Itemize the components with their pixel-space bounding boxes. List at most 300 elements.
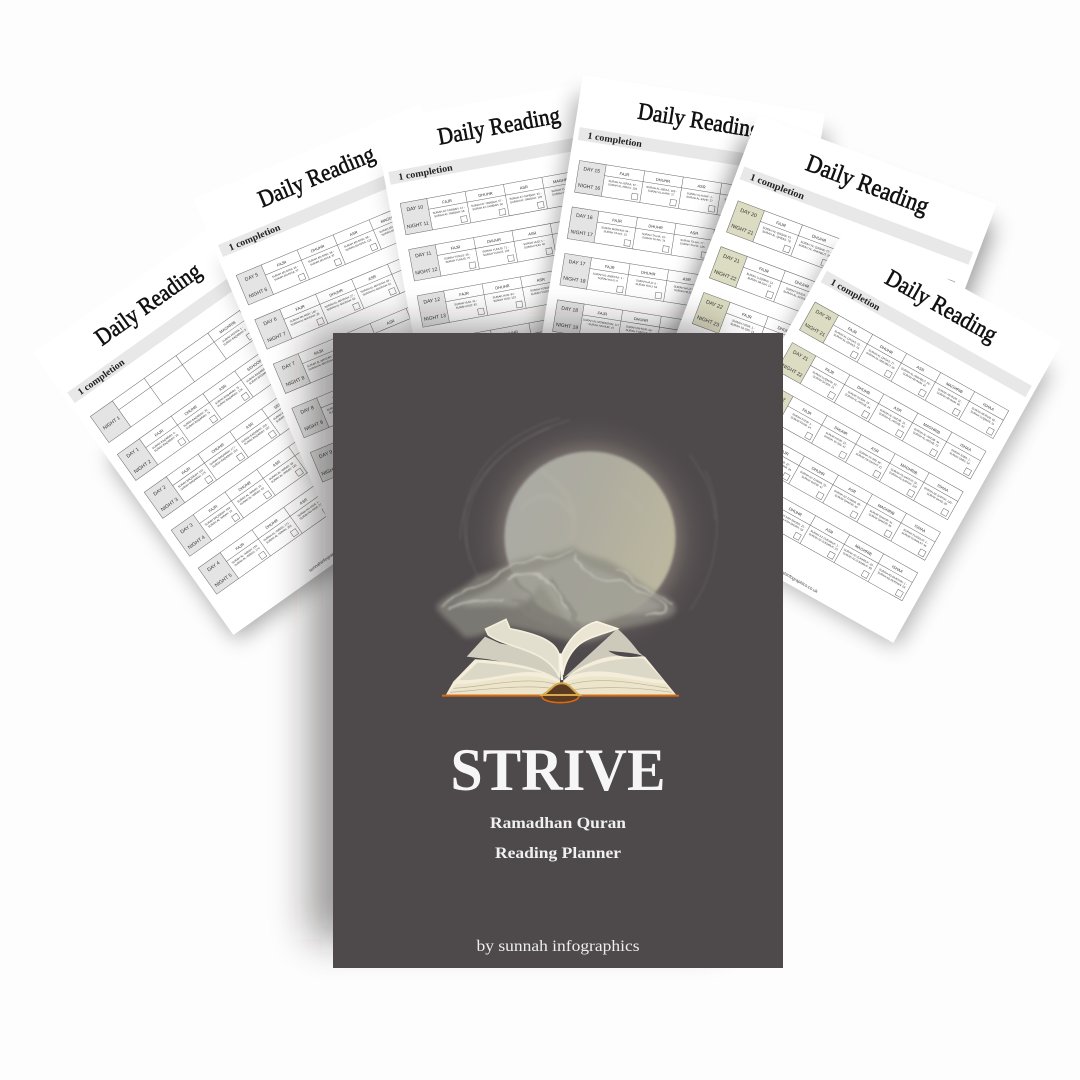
row day 23: SURAH FUSSILAT: 46 <box>901 531 928 548</box>
row day 22: SURAH FATIR: 14 <box>790 415 812 430</box>
row night 1: NIGHT 1 <box>102 415 122 431</box>
row day 11: NIGHT 12 <box>415 267 438 277</box>
row day 5: MAGHRIB <box>380 212 399 224</box>
row day 21: SURAH AL-AHZAB: 14 <box>783 289 812 304</box>
row day 11: FAJR <box>450 244 461 251</box>
row day 23: SURAH GHAFIR: 41 - <box>869 509 895 526</box>
book left pages <box>446 619 560 695</box>
row day 5: FAJR <box>276 259 287 268</box>
row day 5: SURAH AN-NISA: 24 - <box>271 264 299 279</box>
row night 1: SURAH BAQARAH: 5 <box>222 327 247 347</box>
row day 2: SURAH BAQARAH: 233 - <box>272 399 301 421</box>
row day 13: ASR <box>545 323 554 329</box>
row day 21: ISHAA <box>959 442 973 453</box>
row day 12: SURAH YUSUF: 1 - <box>530 284 555 293</box>
row day 5: SURAH AN-NISA: 87 <box>309 253 336 267</box>
row day 16: NIGHT 17 <box>570 229 593 238</box>
row day 23: SURAH SAAD: 27 - <box>768 452 792 468</box>
row day 21: ASR <box>893 405 903 413</box>
row day 3: ASR <box>272 459 281 468</box>
row day 2: SURAH BAQARAH: 202 <box>211 448 239 469</box>
sheet 2 section heading: 1 completion <box>228 223 283 254</box>
row day 10: SURAH AT-TAWBAH: 57 - <box>471 198 504 208</box>
row day 20: SURAH AR-RUM: 60 <box>936 390 961 407</box>
row day 4: SURAH AN-NISA: 1 - <box>297 499 321 518</box>
row day 10: SURAH AT-TAWBAH: 93 - <box>509 191 542 201</box>
sheet 1 footer: sunnahinfographics.co.uk <box>308 539 352 573</box>
row day 2: SURAH BAQARAH: 203 - <box>240 422 269 444</box>
row day 22: SURAH YA-SIN: 48 - <box>858 449 883 466</box>
row day 15: DHUHR <box>655 177 671 184</box>
row day 1: SURAH BAQARAH: 75 - <box>214 384 241 405</box>
row day 24: SURAH ASH-SHURA: 53 <box>775 513 804 532</box>
row day 4: SURAH AL-'IMRAN: 200 <box>265 523 293 545</box>
row day 6: DHUHR <box>328 288 344 298</box>
open book <box>442 619 679 703</box>
sheet 1 section heading: 1 completion <box>76 357 128 398</box>
row day 22 <box>754 383 963 520</box>
row day 18: SURAH FURQAN: 20 <box>625 328 653 336</box>
row day 5: SURAH AN-NISA: 57 <box>273 268 300 282</box>
row day 1: SURAH BAQARAH: 25 <box>153 433 180 453</box>
row day 8: SURAH AL-AN'AM: 74 <box>328 400 356 415</box>
book spine and cover <box>442 653 679 703</box>
row day 23: ISHAA <box>914 523 927 534</box>
row day 23: ASR <box>847 486 857 495</box>
row day 24: SURAH AD-DUKHAN: 59 <box>877 570 907 590</box>
row day 6: SURAH AL-MA'IDAH: 27 - <box>324 293 355 309</box>
row day 23: SURAH GHAFIR: 40 <box>834 493 859 509</box>
row day 17: DHUHR <box>641 270 656 277</box>
row day 21: SURAH SAJDA: 15 <box>747 276 772 289</box>
row day 4 <box>198 440 398 594</box>
row day 1: SURAH BAQARAH: 124 <box>216 387 244 408</box>
row day 2: SURAH BAQARAH: 177 - <box>209 444 237 466</box>
row day 21: SURAH AL-AHZAB: 15 - <box>879 408 908 426</box>
row day 12: NIGHT 13 <box>423 313 447 323</box>
row day 5: SURAH AN-NISA: 125 - <box>379 219 408 234</box>
row day 22: DHUHR <box>777 325 793 335</box>
row day 22: ASR <box>870 446 880 454</box>
row day 10: MAGHRIB <box>553 176 572 184</box>
row day 21: SURAH SAJDA: 15 <box>812 374 836 390</box>
row day 15: SURAH AL-ISRAA: 105 - <box>646 185 677 194</box>
row day 23: FAJR <box>779 448 790 457</box>
row day 22 <box>692 292 920 404</box>
sheet 5 section heading: 1 completion <box>748 172 806 203</box>
row day 7: DHUHR <box>347 332 362 342</box>
row day 1: FAJR <box>154 428 165 438</box>
row day 21: MAGHRIB <box>922 422 941 435</box>
row day 8: FAJR <box>332 392 343 400</box>
moon illustration <box>436 412 717 703</box>
smoke <box>436 547 676 642</box>
row day 17: DAY 17 <box>568 259 586 268</box>
row day 21: SURAH AL-AHZAB: 73 <box>912 430 940 448</box>
row day 1 <box>117 326 317 480</box>
row day 11: SURAH YUNUS: 109 <box>483 248 510 257</box>
row day 20: SURAH AL-QASAS: 77 - <box>868 348 897 367</box>
row day 11: SURAH YUNUS: 36 - <box>444 252 471 261</box>
row day 21: SURAH SAJDA: 16 - <box>785 286 812 300</box>
row day 7: SURAH AL-MA'IDAH: 82 - <box>306 352 338 368</box>
row day 20: SURAH LUQMAN: 11 <box>970 409 996 426</box>
row day 7: DAY 7 <box>281 361 297 372</box>
row day 1: ASR <box>218 383 227 392</box>
row day 18: DHUHR <box>633 316 649 323</box>
row day 3: SURAH AL-'IMRAN: 15 <box>207 508 233 529</box>
row day 16: DHUHR <box>648 223 663 230</box>
row day 4: FAJR <box>234 542 245 551</box>
row day 2: DAY 2 <box>152 484 168 498</box>
row day 12: ASR <box>536 276 545 283</box>
row day 23: SURAH GAFIR: 47 <box>801 475 824 490</box>
row day 20: ISHAA <box>982 402 995 412</box>
row day 3: FAJR <box>207 504 218 513</box>
row day 18: - SURAH AN-NUR: 47 <box>586 322 615 330</box>
row day 17: FAJR <box>605 264 615 270</box>
cover byline: by sunnah infographics <box>476 938 640 955</box>
row day 10 <box>400 163 624 235</box>
row day 12: SURAH HUD: 84 - <box>492 292 516 300</box>
row day 21: SURAH LUQMAN: 12 - <box>746 272 775 286</box>
row day 15: SURAH AL-ISRAA: 67 - <box>608 179 638 187</box>
row day 10: ASR <box>519 184 528 190</box>
book right pages <box>562 622 676 695</box>
row day 21: SURAH AL-AHZAB: 43 <box>878 411 906 429</box>
row day 20: NIGHT 21 <box>730 223 754 237</box>
row day 10: FAJR <box>442 198 452 205</box>
row day 4: SURAH AL-'IMRAN: 171 - <box>263 520 291 542</box>
row day 22: SURAH YA-SIN: 47 <box>823 434 847 449</box>
row day 20: DHUHR <box>811 233 827 243</box>
row day 21: SURAH AL-AHZAB: 44 - <box>913 427 942 445</box>
sheet 3 section heading: 1 completion <box>398 163 454 183</box>
sheet 6: days 20 to 24 <box>679 223 1066 647</box>
row day 22: SURAH AS-SAFFAT: 125 - <box>923 486 954 506</box>
row day 24 <box>732 477 918 601</box>
row day 10: SURAH AT-TAWBAH: 92 <box>472 202 504 211</box>
row day 18: DAY 18 <box>561 306 579 314</box>
row day 2: SURAH BAQARAH: 142 - <box>177 467 205 489</box>
row day 24: SURAH AZ-ZUKHRUF: 1 - <box>810 529 841 549</box>
row day 5: DAY 5 <box>244 272 260 283</box>
row day 17: SURAH HAJJ: 5 <box>597 276 619 283</box>
row day 11: SURAH YUNUS: 70 <box>445 256 471 264</box>
sheet 4 section heading: 1 completion <box>587 132 643 150</box>
row day 2: FAJR <box>180 466 191 476</box>
row day 20: SURAH AR-RUM: 10 <box>902 371 927 388</box>
row day 1: SURAH BAQARAH: 125 - <box>245 361 274 383</box>
row day 10: DHUHR <box>478 190 493 198</box>
row day 16: SURAH TA-HA: 15 - <box>642 232 667 240</box>
row day 12: SURAH YUSUF: 52 <box>531 288 556 296</box>
sheet 3 title: Daily Reading <box>436 103 562 151</box>
row day 20: ASR <box>916 364 925 373</box>
row day 18: FAJR <box>597 310 608 317</box>
row day 11: SURAH HUD: 40 <box>524 242 546 250</box>
row day 23: DHUHR <box>811 465 826 477</box>
row day 21: DAY 21 <box>791 349 809 363</box>
row day 13 <box>426 302 650 373</box>
row night 1 <box>90 288 290 443</box>
row day 8 <box>292 323 509 438</box>
row day 11: SURAH YUNUS: 71 - <box>482 245 509 254</box>
row day 4: ASR <box>299 497 308 506</box>
sheet 5: days 20 to 22 <box>628 114 1002 543</box>
row day 22: SURAH AS-SAFFAT: 22 - <box>890 467 919 486</box>
row day 17: SURAH AL-ANBIYAA: 1 - <box>593 272 624 280</box>
sheet 4: days 15 to 18 <box>525 74 832 456</box>
row day 22: NIGHT 23 <box>696 315 720 329</box>
row day 12: DHUHR <box>495 283 510 290</box>
row day 20: DAY 20 <box>739 208 758 219</box>
row day 22: SURAH FATIR: 15 - <box>825 431 848 446</box>
cover shadow <box>310 327 720 939</box>
row day 3: SURAH AL-'IMRAN: 133 <box>270 463 298 484</box>
sheet 2: days 5 to 9 <box>193 104 553 518</box>
row day 23: SURAH AZ-ZUMAR: 32 - <box>799 470 828 488</box>
row day 5 <box>236 190 453 305</box>
row day 7: ASR <box>386 318 395 326</box>
row day 20: MAGHRIB <box>945 381 964 395</box>
row day 20 <box>799 302 1009 439</box>
row day 23: SURAH AZ-ZUMAR: 44 <box>764 454 792 472</box>
row day 18 <box>553 300 777 366</box>
row day 22: SURAH AS-SAFFAT: 21 <box>855 452 883 470</box>
row day 24: ASR <box>825 527 834 535</box>
row day 1: SURAH BAQARAH: 141 <box>248 364 276 386</box>
row day 22: DHUHR <box>833 425 849 436</box>
row night 1: MAGHRIB <box>218 319 237 335</box>
row day 7 <box>273 278 490 393</box>
row day 21: FAJR <box>758 266 770 274</box>
row day 10: DAY 10 <box>406 204 424 213</box>
row day 16: FAJR <box>612 217 622 224</box>
sheet 6 title: Daily Reading <box>881 265 1001 348</box>
row day 5: SURAH AN-NISA: 124 <box>345 237 372 252</box>
row day 4: NIGHT 5 <box>214 572 234 589</box>
row day 23: SURAH GHAFIR: 85 <box>868 512 893 529</box>
row day 1: SURAH BAQARAH: 26 - <box>182 407 210 428</box>
row day 24: SURAH ASH-SHURA: 13 - <box>776 510 807 529</box>
row day 21: DHUHR <box>856 384 871 396</box>
row day 21: NIGHT 22 <box>781 363 803 379</box>
row day 20: DAY 20 <box>814 309 832 322</box>
row day 20: FAJR <box>847 326 858 335</box>
row day 23: SURAH AZ-ZUMAR: 48 - <box>833 489 862 508</box>
sheet 1: days 1 to 4 <box>33 211 437 640</box>
row day 22: SURAH FATIR: 1 - <box>792 412 814 427</box>
row day 11: SURAH HUD: 1 - <box>523 238 545 246</box>
row day 16: SURAH TA-HA: 13 <box>603 229 627 237</box>
sheet 2 title: Daily Reading <box>254 141 379 213</box>
row day 15: DAY 15 <box>583 166 601 175</box>
row day 8: NIGHT 9 <box>304 419 324 433</box>
row day 20: SURAH AL-QASAS: 51 - <box>834 329 863 348</box>
row day 15: SURAH AL-KAHF: 1 - <box>686 191 714 199</box>
row day 15: FAJR <box>619 171 630 177</box>
row day 22: DAY 22 <box>705 299 723 311</box>
row day 20: SURAH AL-QASAS: 76 <box>833 332 860 350</box>
row day 21: SURAH AL-AHZAB: 14 <box>844 392 872 410</box>
row day 10: SURAH YUNUS: 35 <box>552 188 577 197</box>
row day 11: DAY 11 <box>415 251 432 259</box>
row day 21: SURAH SABA: 54 <box>949 451 971 466</box>
row day 23 <box>755 437 940 560</box>
row day 20: SURAH AL-QASAS: 51 - <box>762 225 793 240</box>
sheet 4 title: Daily Reading <box>636 99 762 144</box>
row day 11: MAGHRIB <box>561 222 581 231</box>
row day 2: ASR <box>245 421 254 430</box>
row day 15: ASR <box>697 183 706 190</box>
row day 6: DAY 6 <box>263 316 278 327</box>
row day 13: DAY 13 <box>432 343 449 352</box>
row day 3: SURAH BAQARAH: 253 - <box>204 505 232 527</box>
row day 5: ASR <box>349 229 358 237</box>
row day 17: ASR <box>682 276 691 282</box>
row day 4: SURAH AL-'IMRAN: 134 - <box>231 543 259 565</box>
row day 17: NIGHT 18 <box>563 275 586 285</box>
row day 22: DAY 22 <box>769 390 786 404</box>
row day 8: DAY 8 <box>300 405 315 416</box>
row day 2 <box>144 364 344 518</box>
row day 6: SURAH AL-MA'IDAH: 26 <box>290 311 320 327</box>
row day 21: FAJR <box>824 366 835 376</box>
row day 4: SURAH AN-NISA: 23 <box>299 502 323 521</box>
row day 15 <box>575 161 799 227</box>
row day 21: DAY 21 <box>722 254 741 265</box>
row day 17: SURAH HAJJ: 54 <box>635 282 658 289</box>
row day 23: MAGHRIB <box>877 503 896 516</box>
row day 1: SURAH BAQARAH: 74 <box>185 410 211 430</box>
row day 6: NIGHT 7 <box>267 331 287 344</box>
row day 5: NIGHT 6 <box>248 287 269 300</box>
row day 7: SURAH AL-AN'AM: 35 <box>346 341 374 356</box>
row day 21 <box>709 247 937 359</box>
row day 10: SURAH AT-TAWBAH: 56 <box>434 209 465 218</box>
row day 10: SURAH YUNUS: 1 - <box>551 185 577 193</box>
row day 22: FAJR <box>801 407 813 416</box>
row day 6: SURAH AL-MA'IDAH: 58 <box>326 296 356 312</box>
row day 17: SURAH HAJJ: 6 - <box>636 278 658 286</box>
row day 10: SURAH AT-TAWBAH: 129 <box>510 195 543 204</box>
row day 24: MAGHRIB <box>854 543 873 557</box>
row day 3: DHUHR <box>237 480 252 492</box>
row day 21: NIGHT 22 <box>713 269 737 283</box>
row day 17: SURAH HAJJ: 55 - <box>673 284 697 292</box>
row day 18: SURAH AN-NUR: 36 - <box>626 324 654 333</box>
row day 20: FAJR <box>775 220 787 228</box>
row day 21 <box>777 343 986 479</box>
row day 1: SEHOOR <box>246 358 263 372</box>
row night 1: SURAH FATIHA: 1 - <box>221 326 244 343</box>
row day 24: DHUHR <box>788 506 803 518</box>
row day 1: SURAH BAQARAH: 6 - <box>151 430 177 450</box>
row day 3: SURAH AL-'IMRAN: 93 - <box>268 460 295 481</box>
row day 12: DAY 12 <box>423 297 441 306</box>
row day 9: DAY 9 <box>318 449 334 460</box>
row day 20 <box>726 201 954 313</box>
row day 12: SURAH HUD: 123 <box>493 295 517 303</box>
row day 15: SURAH AL-KAHF: 27 <box>647 189 675 197</box>
row day 5: SURAH AN-NISA: 147 <box>381 222 408 237</box>
row day 16: SURAH MARYAM: 54 - <box>601 225 630 234</box>
sheet 5 title: Daily Reading <box>802 150 932 220</box>
row day 20: SURAH AL-ANKABUT: 25 <box>865 351 896 370</box>
row day 20: NIGHT 21 <box>803 322 826 339</box>
row day 21: SURAH SAJDA: 16 - <box>847 390 872 406</box>
row day 1: DHUHR <box>183 404 198 416</box>
row day 20: SURAH AL-QASAS: 77 - <box>800 240 831 255</box>
row day 16 <box>567 207 791 273</box>
row day 4: DAY 4 <box>206 560 221 573</box>
row day 7: FAJR <box>313 348 324 356</box>
row day 6: SURAH AN-NISA: 148 - <box>289 308 318 324</box>
cover panel <box>333 333 783 968</box>
row day 3 <box>171 402 371 556</box>
row day 1: NIGHT 2 <box>133 459 153 475</box>
row day 24: SURAH AD-DUKHAN: 1 - <box>878 567 908 586</box>
row day 20: SURAH AR-RUM: 60 - <box>971 406 997 423</box>
row day 24: ISHAA <box>891 564 904 574</box>
row day 24: SURAH AZ-ZUKHRUF: 23 <box>808 532 839 552</box>
row day 8: SURAH AL-AN'AM: 36 - <box>326 397 355 412</box>
row day 2: SURAH BAQARAH: 232 <box>243 425 271 446</box>
row day 22: SURAH AS-SAFFAT: 124 <box>888 470 918 489</box>
row day 15: SURAH AL-KAHF: 28 - <box>724 197 753 206</box>
row day 11 <box>409 209 633 281</box>
row day 20: SURAH AL-QASAS: 76 <box>762 229 792 244</box>
row day 6: SURAH AL-MA'IDAH: 59 - <box>360 278 391 294</box>
row day 3: SURAH AL-'IMRAN: 16 - <box>236 483 264 504</box>
row day 12: FAJR <box>459 290 469 297</box>
row day 13: DHUHR <box>503 329 519 337</box>
row day 23: SURAH FUSSILAT: 1 - <box>903 528 929 545</box>
row day 6 <box>255 234 472 349</box>
row day 21: SURAH SABA: 1 - <box>950 448 972 463</box>
row day 11: ASR <box>528 230 537 237</box>
row day 15: SURAH AL-ISRAA: 104 <box>608 182 638 191</box>
sheet 3: days 10 to 13 <box>374 77 677 462</box>
row day 3: DAY 3 <box>179 522 194 535</box>
row day 6: ASR <box>367 274 377 282</box>
row day 6: FAJR <box>295 303 306 312</box>
row day 21: SURAH LUQMAN: 12 - <box>812 370 839 388</box>
row day 9: NIGHT 10 <box>321 463 344 477</box>
row day 20: DHUHR <box>879 344 894 355</box>
row day 22: ISHAA <box>937 483 950 493</box>
cover subtitle line 1: Ramadhan Quran <box>490 815 626 832</box>
row day 6: SURAH AL-MA'IDAH: 81 <box>362 281 392 297</box>
row day 11: DHUHR <box>486 237 502 244</box>
row day 5: DHUHR <box>310 243 325 253</box>
row day 2: DHUHR <box>210 442 225 454</box>
row day 10: SURAH AT-TAWBAH: 14 - <box>432 205 465 215</box>
row day 22: FAJR <box>741 312 752 320</box>
row day 15: SURAH AL-KAHF: 74 <box>725 201 752 209</box>
row day 17 <box>560 253 784 320</box>
row day 3: NIGHT 4 <box>187 535 207 551</box>
row day 16: SURAH TA-HA: 135 <box>680 241 705 249</box>
row day 7: SURAH AL-MA'IDAH: 120 <box>308 355 340 372</box>
row day 15: NIGHT 16 <box>577 183 601 192</box>
row day 12: SURAH HUD: 41 - <box>454 299 477 307</box>
row day 18: NIGHT 19 <box>555 322 579 331</box>
row day 5: SURAH AN-NISA: 58 - <box>307 249 335 264</box>
row day 7: SURAH AL-AN'AM: 1 - <box>344 338 372 353</box>
row day 21: DHUHR <box>794 279 810 289</box>
